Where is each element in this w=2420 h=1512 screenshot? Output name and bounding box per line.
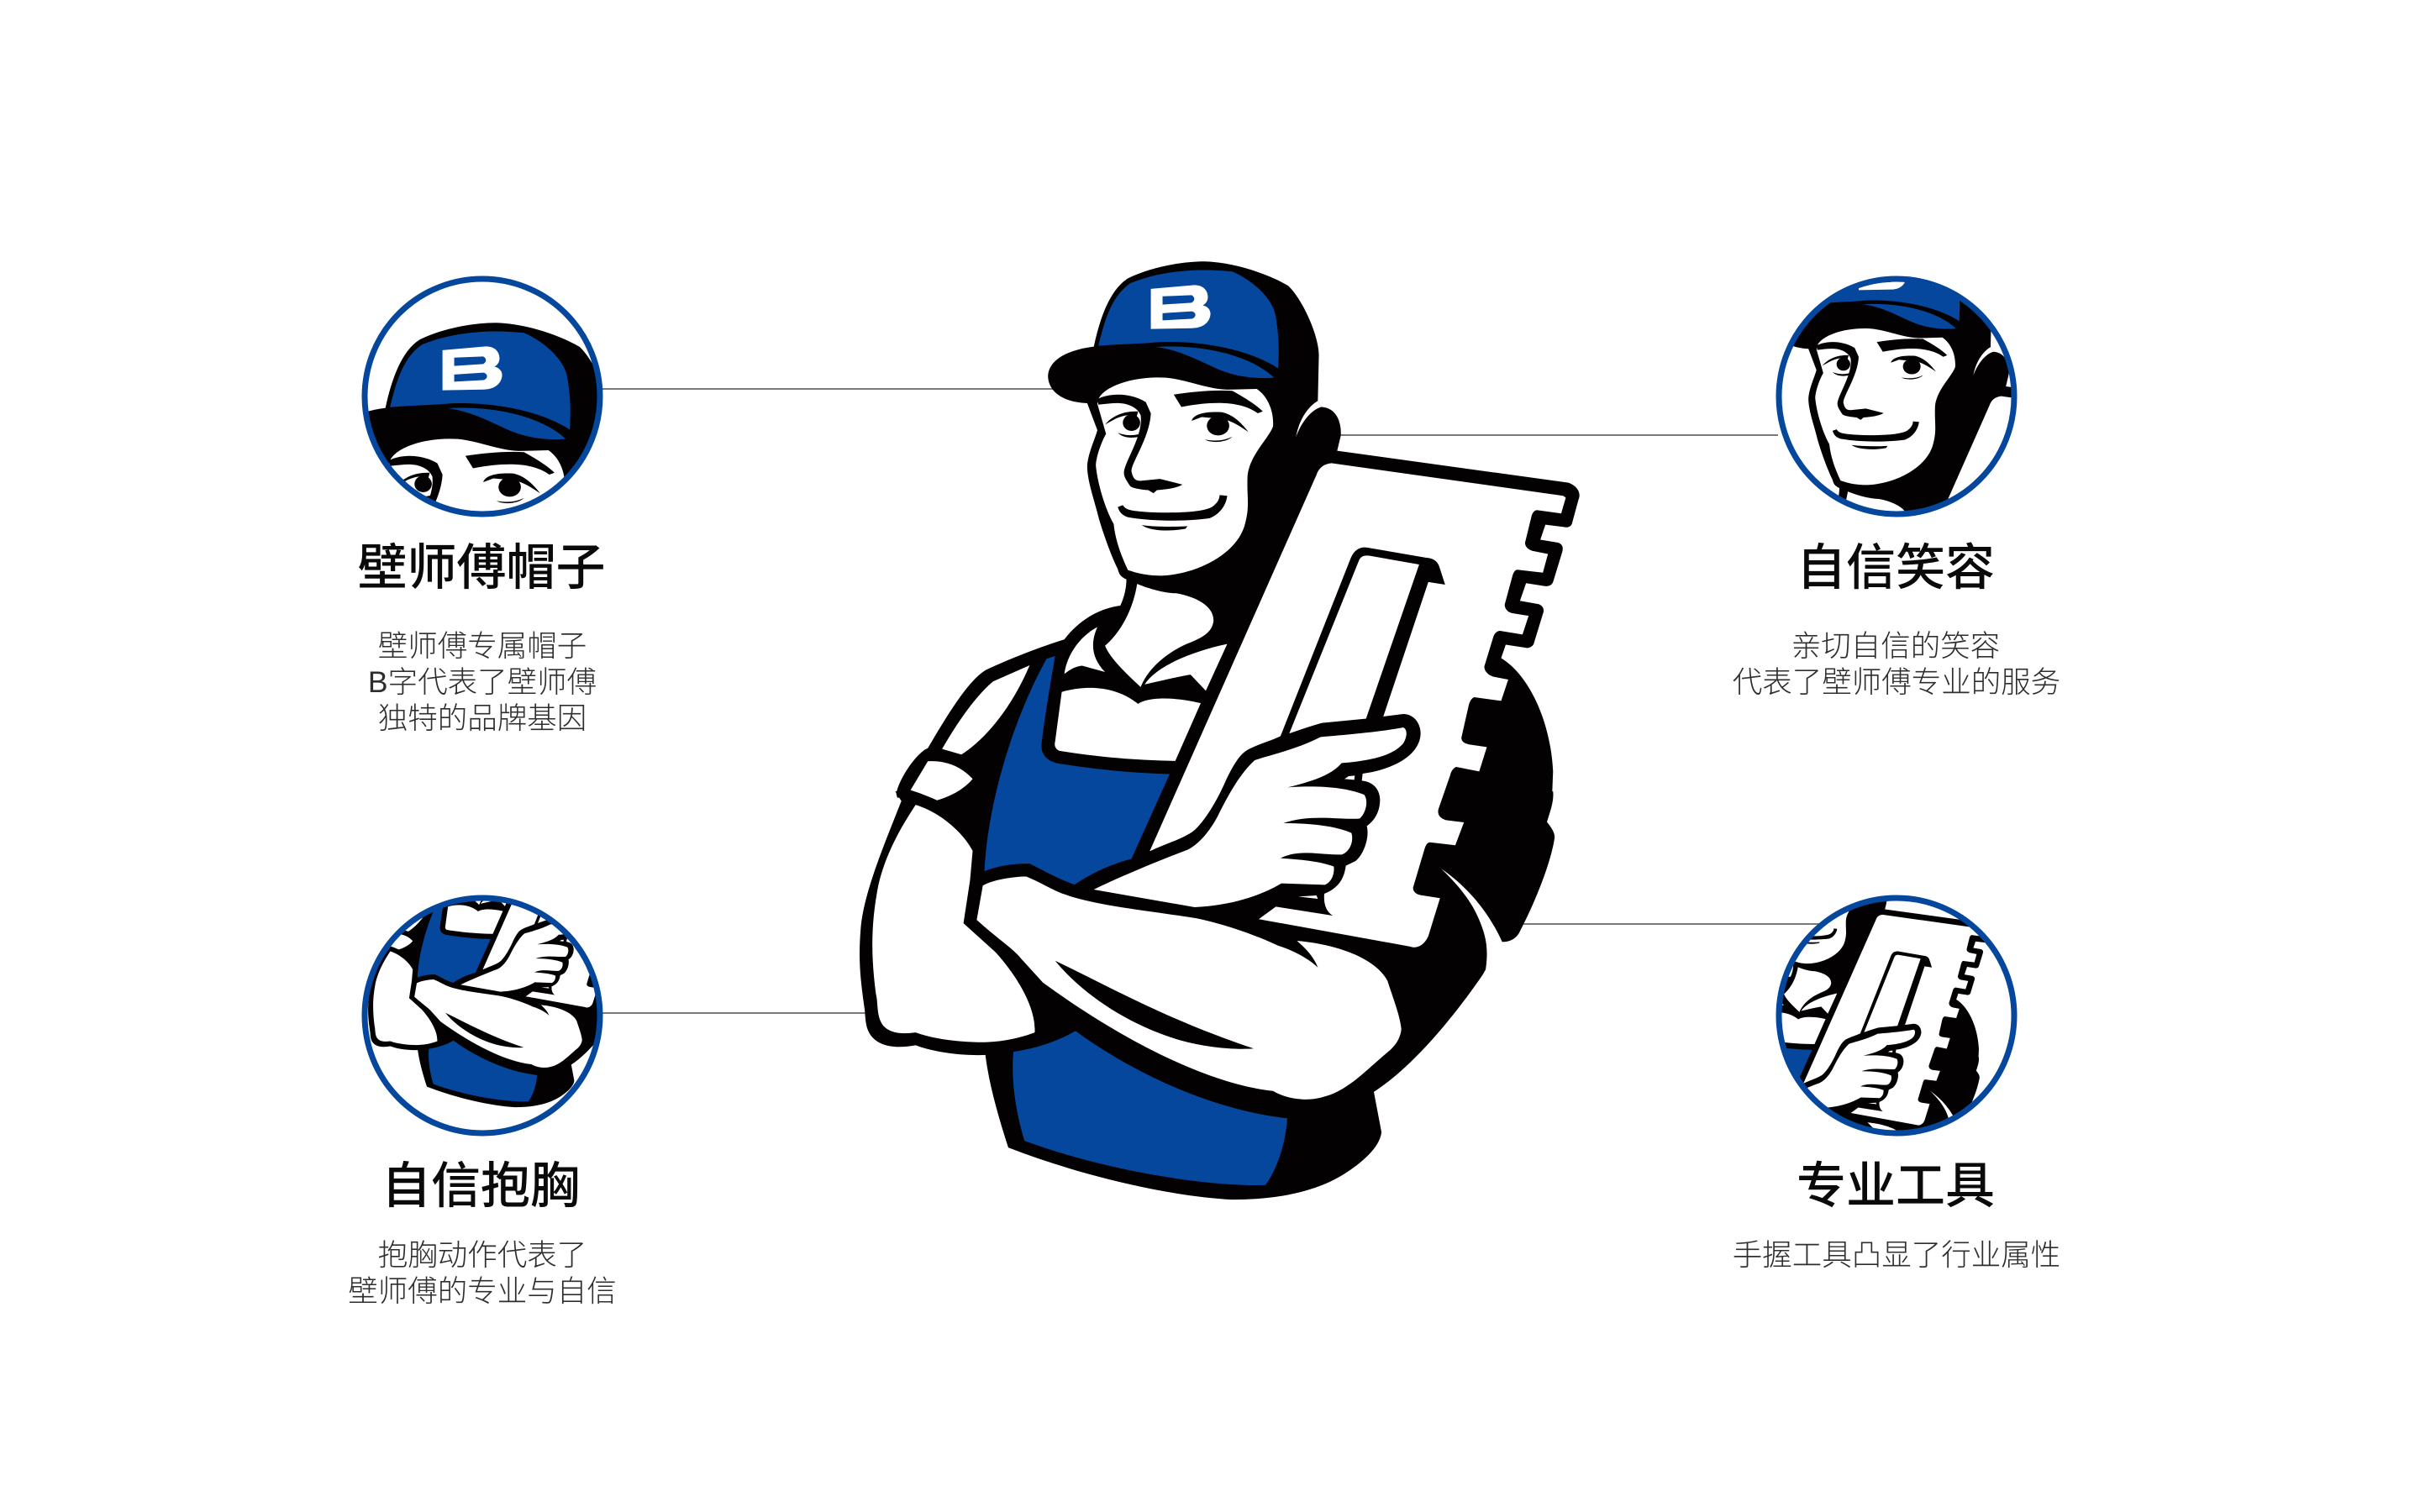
heading: crossed arms: 自信抱胸 xyxy=(381,1158,580,1214)
text: crossed arms description: 壁师傅的专业与自信 xyxy=(348,1274,617,1308)
text: smile description: 代表了壁师傅专业的服务 xyxy=(1733,665,2060,699)
text: smile description xyxy=(1733,629,2060,699)
text: smile description: 亲切自信的笑容 xyxy=(1791,629,2000,663)
heading: trowel: 专业工具 xyxy=(1797,1158,1995,1214)
text: trowel description: 手握工具凸显了行业属性 xyxy=(1733,1238,2060,1272)
callout: crossed arms circle xyxy=(361,895,603,1136)
cap xyxy=(1098,270,1279,378)
sleeve and cuff xyxy=(911,665,1029,801)
face xyxy=(1096,377,1273,575)
text: cap description: 壁师傅专属帽子 xyxy=(378,629,587,663)
hand gripping trowel xyxy=(1076,714,1421,930)
text: cap description: B字代表了壁师傅 xyxy=(368,665,597,699)
callout: cap circle xyxy=(361,276,603,517)
trowel xyxy=(1150,463,1565,948)
heading: cap: 壁师傅帽子 xyxy=(357,540,606,596)
callout: smile circle xyxy=(1776,276,2017,517)
callout: trowel circle xyxy=(1776,895,2017,1136)
connector lines xyxy=(602,389,1819,1013)
mascot upper body: cap, face, shirt, trowel xyxy=(897,261,1580,948)
heading: smile: 自信笑容 xyxy=(1797,540,1995,596)
mascot silhouette lower xyxy=(860,791,1555,1200)
crossed arms and lower apron xyxy=(872,805,1502,1185)
neck and collar xyxy=(1055,584,1227,761)
infographic canvas xyxy=(350,261,2059,1304)
text: crossed arms description: 抱胸动作代表了 xyxy=(378,1238,587,1272)
text: crossed arms description xyxy=(348,1238,617,1308)
text: cap description: 独特的品牌基因 xyxy=(378,701,587,735)
mascot: worker with cap, crossed arms and trowel xyxy=(860,261,1580,1200)
text: cap description xyxy=(368,629,597,735)
apron bib xyxy=(984,656,1170,885)
